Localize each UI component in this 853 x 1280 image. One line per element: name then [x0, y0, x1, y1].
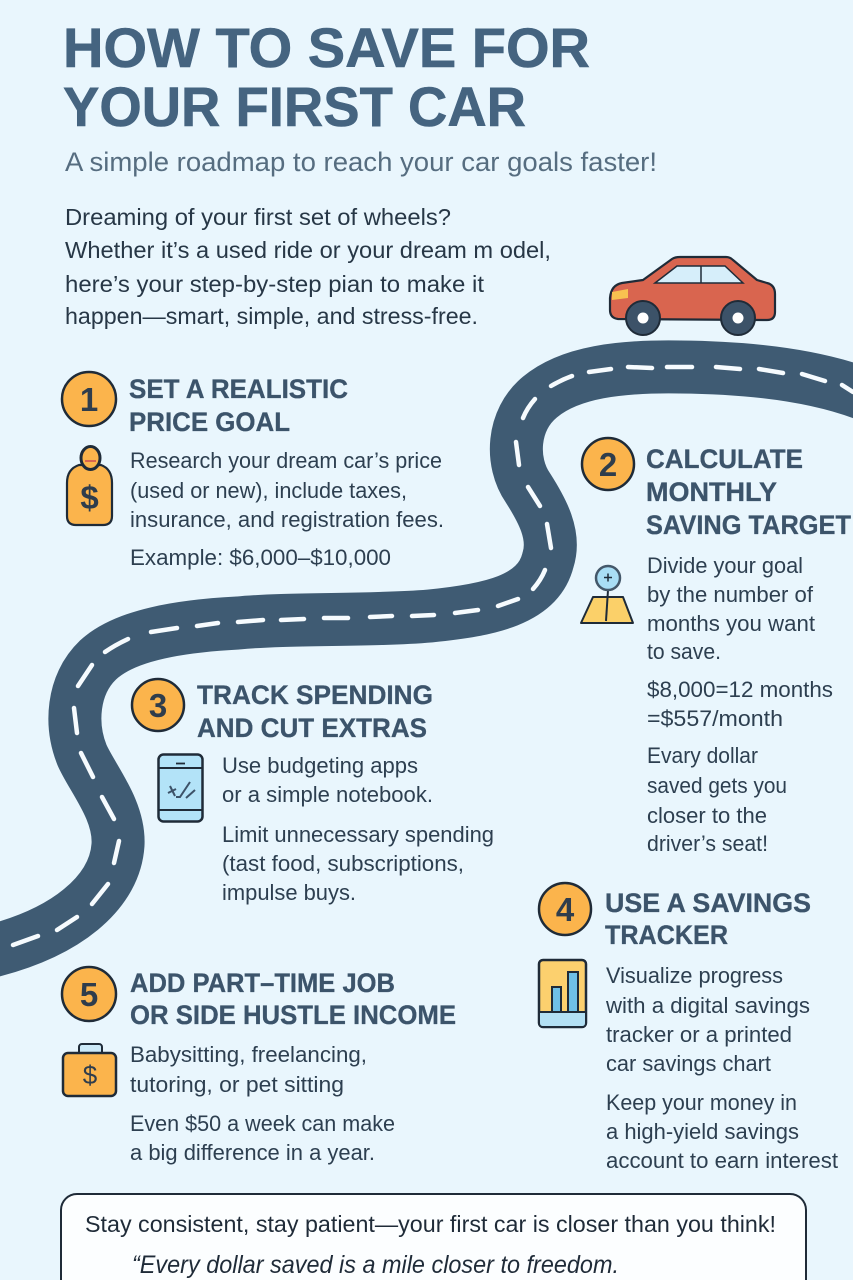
body text 5: Even $50 a week can make [130, 1111, 395, 1136]
step 4 [539, 883, 838, 1173]
body text 5: tutoring, or pet sitting [130, 1072, 344, 1097]
body text 3: Use budgeting apps [222, 753, 418, 778]
heading 2 [646, 444, 851, 540]
body text 2: =$557/month [647, 706, 783, 731]
body text 5: a big difference in a year. [130, 1140, 375, 1165]
closing line: Stay consistent, stay patient—your first car is closer than you think! [85, 1211, 776, 1237]
heading 1 [129, 374, 348, 437]
quote: “Every dollar saved is a mile closer to freedom. [132, 1251, 619, 1279]
heading 1: PRICE GOAL [129, 407, 290, 437]
body text 2: by the number of [647, 582, 814, 607]
heading 5: ADD PART–TIME JOB [130, 968, 395, 998]
number badge 4 [539, 883, 591, 935]
body text 2 [647, 553, 833, 856]
heading 1: SET A REALISTIC [129, 374, 348, 404]
title [63, 16, 590, 138]
heading 5 [130, 968, 456, 1030]
body text 2: Evary dollar [647, 743, 758, 768]
body text 2: months you want [647, 611, 815, 636]
body text 5: Babysitting, freelancing, [130, 1042, 367, 1067]
icon: phone [158, 754, 202, 822]
number badge 1: 1 [80, 381, 98, 418]
body text 4: with a digital savings [605, 993, 810, 1018]
body text 3: (tast food, subscriptions, [222, 851, 464, 876]
icon: red car [610, 257, 775, 335]
body text 4: car savings chart [606, 1051, 771, 1076]
number badge 1 [62, 372, 116, 426]
subtitle: A simple roadmap to reach your car goals faster! [65, 147, 657, 177]
title: HOW TO SAVE FOR [63, 16, 590, 79]
intro text: Whether it’s a used ride or your dream m odel, [65, 237, 551, 263]
heading 4 [605, 888, 811, 950]
heading 3: TRACK SPENDING [197, 680, 433, 710]
heading 2: CALCULATE [646, 444, 803, 474]
body text 3: Limit unnecessary spending [222, 822, 494, 847]
step 2 [581, 438, 851, 856]
winding road [0, 367, 853, 955]
number badge 2: 2 [599, 446, 617, 483]
body text 3 [222, 753, 494, 905]
icon: map pin [581, 566, 633, 623]
number badge 3: 3 [149, 687, 167, 724]
title: YOUR FIRST CAR [63, 75, 526, 138]
body text 5 [130, 1042, 395, 1165]
number badge 2 [582, 438, 634, 490]
number badge 5: 5 [80, 976, 98, 1013]
number badge 4: 4 [556, 891, 575, 928]
step 3 [132, 679, 494, 905]
body text 4 [605, 963, 838, 1173]
body text 2: $8,000=12 months [647, 677, 833, 702]
number badge 3 [132, 679, 184, 731]
body text 2: closer to the [647, 803, 767, 828]
body text 1: Research your dream car’s price [130, 448, 442, 473]
icon: price tag [67, 446, 112, 525]
body text 1: Example: $6,000–$10,000 [130, 545, 391, 570]
body text 3: impulse buys. [222, 880, 356, 905]
body text 3: or a simple notebook. [222, 782, 433, 807]
body text 1 [130, 448, 444, 570]
icon: money briefcase [63, 1044, 116, 1096]
heading 2: MONTHLY [646, 477, 777, 507]
intro text: happen—smart, simple, and stress-free. [65, 303, 478, 329]
body text 4: a high-yield savings [606, 1119, 799, 1144]
heading 5: OR SIDE HUSTLE INCOME [130, 1000, 456, 1030]
body text 4: account to earn interest [606, 1148, 838, 1173]
body text 2: to save. [647, 639, 721, 664]
step 5 [62, 967, 456, 1165]
heading 4: USE A SAVINGS [605, 888, 811, 918]
icon: price tag: $ [80, 479, 99, 516]
intro text: Dreaming of your first set of wheels? [65, 204, 451, 230]
intro text [65, 204, 551, 329]
body text 4: Visualize progress [606, 963, 783, 988]
heading 4: TRACKER [605, 920, 728, 950]
heading 3 [197, 680, 433, 743]
step 1 [62, 372, 444, 570]
body text 4: tracker or a printed [606, 1022, 792, 1047]
body text 1: (used or new), include taxes, [130, 478, 407, 503]
number badge 5 [62, 967, 116, 1021]
icon: savings chart [539, 960, 586, 1027]
intro text: here’s your step-by-step pian to make it [65, 271, 485, 297]
body text 1: insurance, and registration fees. [130, 507, 444, 532]
body text 2: Divide your goal [647, 553, 803, 578]
body text 2: driver’s seat! [647, 831, 768, 856]
closing message card [61, 1194, 806, 1280]
body text 2: saved gets you [647, 773, 787, 798]
icon: money briefcase: $ [83, 1060, 98, 1090]
body text 4: Keep your money in [606, 1090, 797, 1115]
heading 3: AND CUT EXTRAS [197, 713, 427, 743]
